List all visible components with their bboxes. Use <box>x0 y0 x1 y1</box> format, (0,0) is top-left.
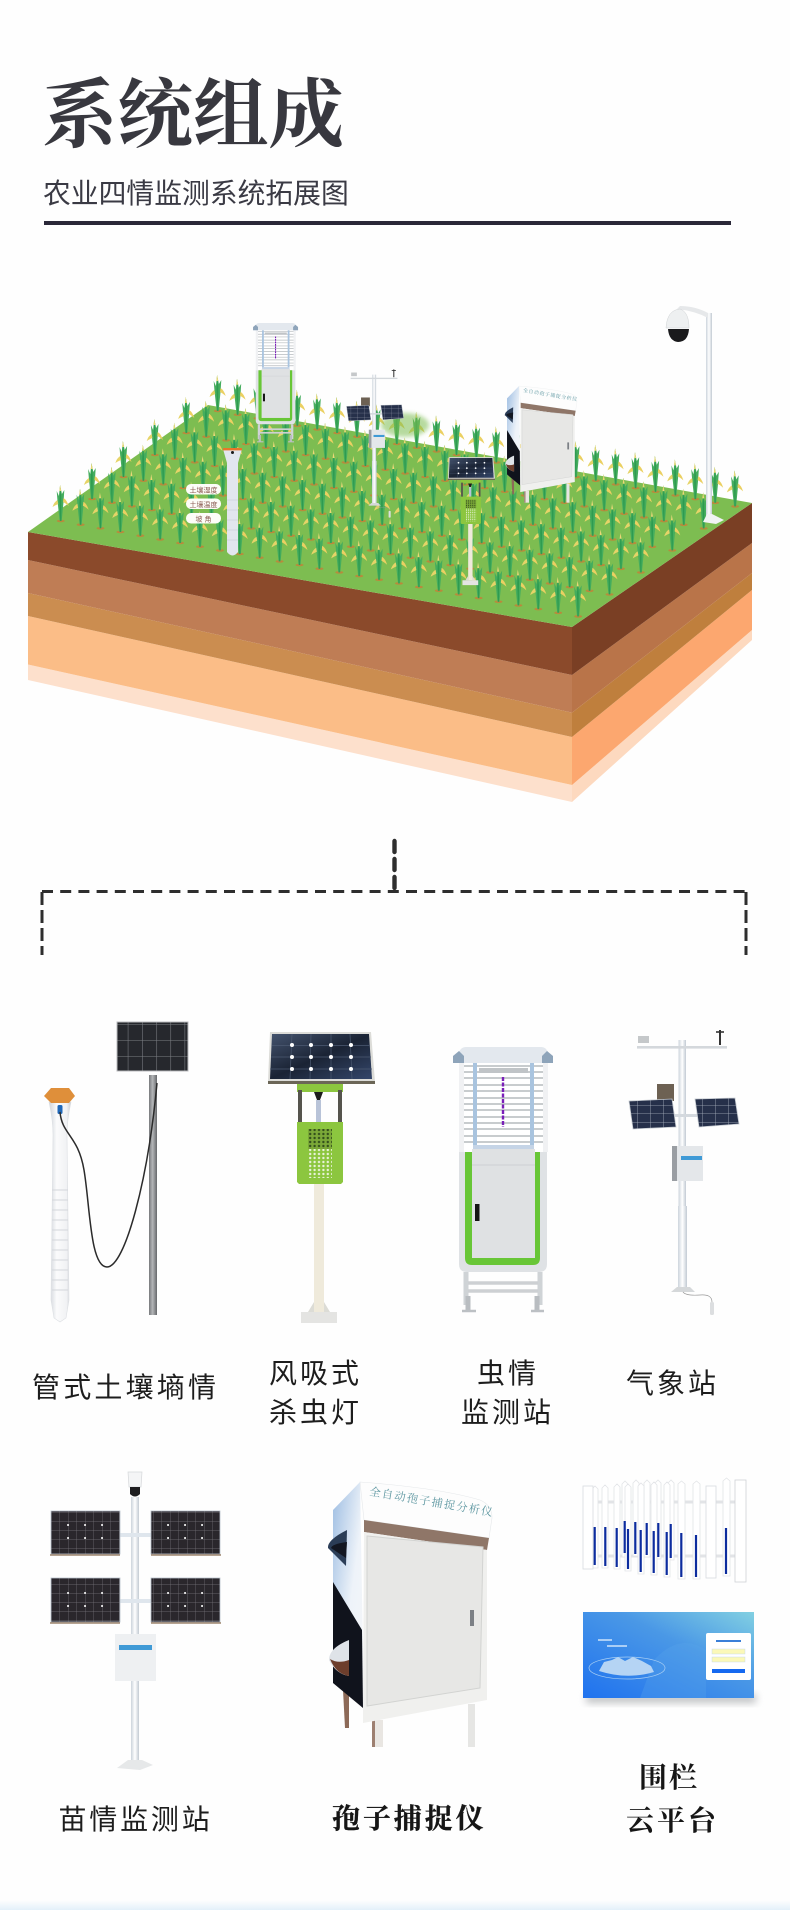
base plate <box>117 1760 153 1770</box>
tube sensor body <box>44 1088 75 1322</box>
label: insect station: 虫情 <box>477 1358 539 1389</box>
field device: surveillance camera on pole <box>666 306 724 524</box>
device: insect monitoring station <box>453 1047 553 1311</box>
dashed connector bracket <box>42 841 746 955</box>
camera <box>128 1472 142 1487</box>
panel lower edges <box>50 1555 221 1623</box>
cable <box>60 1083 157 1267</box>
label: fence and cloud platform: 围栏 <box>639 1762 699 1794</box>
rows of crop plants <box>52 375 743 618</box>
label: tube soil moisture: 管式土壤墒情 <box>32 1372 219 1403</box>
device: crop seedling monitoring station <box>50 1472 221 1770</box>
cloud platform screenshot <box>583 1612 756 1703</box>
label: insect station: 监测站 <box>461 1397 554 1428</box>
fence pickets <box>583 1478 746 1582</box>
field device: spore trap <box>505 386 578 503</box>
field device: insect-killing lamp <box>448 457 495 585</box>
farm field illustration <box>28 306 752 802</box>
device: tube soil moisture sensor <box>44 1022 188 1322</box>
label: spore trap: 孢子捕捉仪 <box>332 1803 487 1835</box>
soil block right face <box>572 503 752 802</box>
fence blue strips <box>595 1521 726 1577</box>
label: seedling station: 苗情监测站 <box>58 1804 213 1835</box>
panel arms <box>120 1535 151 1601</box>
field sensor tags: 土壤温度 <box>190 500 218 509</box>
field device: insect monitoring station <box>253 323 298 442</box>
pole <box>131 1497 139 1762</box>
field device: soil moisture tube <box>223 448 242 556</box>
login card <box>706 1633 751 1680</box>
bottom tint band <box>0 1900 790 1910</box>
label: weather station: 气象站 <box>626 1368 719 1399</box>
platform orbit ring <box>589 1657 665 1679</box>
label: insect lamp: 杀虫灯 <box>269 1397 362 1428</box>
title underline <box>44 221 731 225</box>
soil block left face <box>28 532 572 802</box>
label: fence and cloud platform: 云平台 <box>626 1805 719 1837</box>
control box <box>115 1634 156 1681</box>
screen background <box>583 1612 754 1698</box>
heading lines <box>598 1640 627 1646</box>
screenshot shadow <box>586 1694 756 1703</box>
label: insect lamp: 风吸式 <box>269 1358 362 1389</box>
device: spore trap <box>328 1482 495 1747</box>
device: wind-suction insect lamp <box>268 1032 375 1323</box>
field sensor tags <box>186 484 221 524</box>
wave overlay <box>640 1643 706 1698</box>
device: weather station <box>629 1030 739 1315</box>
title: 系统组成 <box>42 75 344 158</box>
cloud mountain graphic <box>599 1657 654 1676</box>
fence rails <box>590 1502 740 1556</box>
steel mounting pole <box>149 1075 157 1315</box>
device: fence <box>583 1478 746 1582</box>
panel cell dots <box>68 1525 202 1606</box>
grass surface <box>28 405 752 627</box>
subtitle: 农业四情监测系统拓展图 <box>43 178 349 209</box>
field sensor tags: 坡 角 <box>196 514 211 524</box>
field device: weather station <box>346 369 404 518</box>
green haze behind weather station <box>381 413 429 437</box>
solar panels <box>51 1511 220 1622</box>
field sensor tags: 土壤湿度 <box>190 486 218 494</box>
solar panel <box>117 1022 188 1071</box>
